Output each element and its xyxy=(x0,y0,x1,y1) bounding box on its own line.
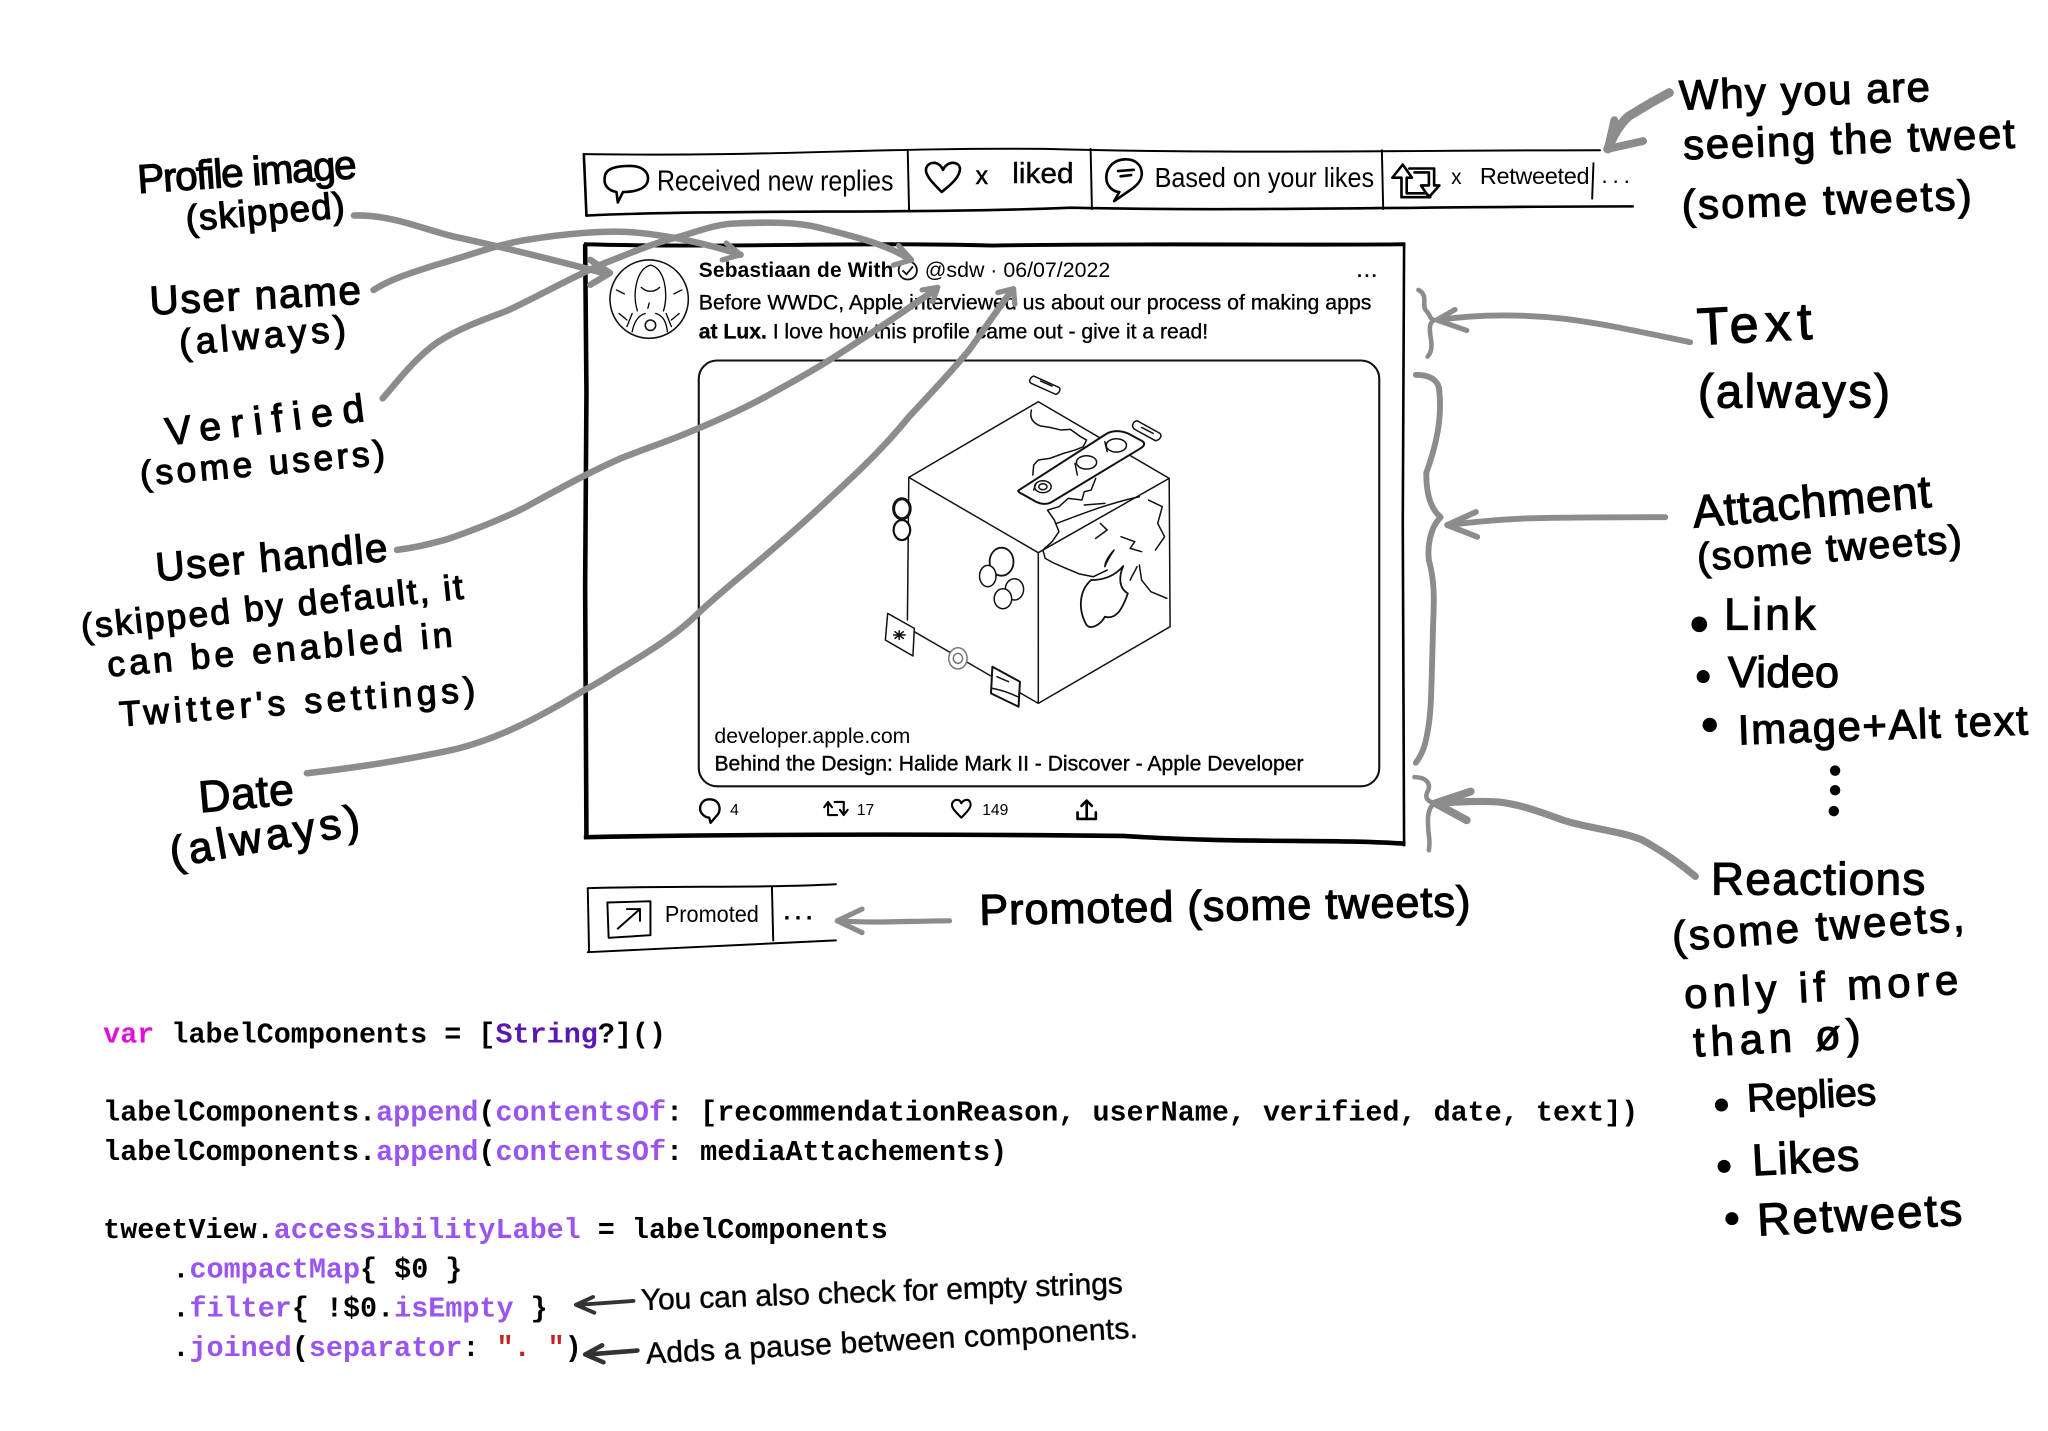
label: verified: Verified xyxy=(163,387,367,454)
icon: topic bubble xyxy=(1106,159,1142,201)
reason: based on your likes: Based on your likes xyxy=(1155,162,1374,193)
handle and date: @sdw · 06/07/2022 xyxy=(925,257,1110,282)
arrow: why you are seeing the tweet xyxy=(1608,93,1669,149)
icon: retweet count: 17 xyxy=(857,802,874,819)
label: user handle: User handle xyxy=(154,524,389,590)
tweet text xyxy=(699,290,1371,343)
label: date: Date xyxy=(196,765,296,822)
label: reactions: only if more xyxy=(1683,956,1959,1017)
annotation: pause between components: Adds a pause between components. xyxy=(645,1312,1139,1371)
label: profile image: (skipped) xyxy=(184,184,346,239)
reactions row xyxy=(700,799,1096,823)
label: reactions xyxy=(1670,854,1966,1246)
icon: like count xyxy=(952,800,1008,819)
link title: Behind the Design: Halide Mark II - Discover - Apple Developer xyxy=(714,751,1304,776)
code block: var labelComponents = [String?]() xyxy=(103,1018,666,1051)
arrow: promoted xyxy=(837,909,950,933)
icon: heart xyxy=(926,163,960,192)
reason: x liked xyxy=(976,158,1074,190)
icon: profile image xyxy=(610,260,688,338)
icon: reply count: 4 xyxy=(730,802,739,819)
arrow: verified xyxy=(383,223,912,398)
code block: labelComponents.append(contentsOf: [recommendationReason, userName, verified, date, text]) xyxy=(103,1097,1638,1130)
label: user handle: can be enabled in xyxy=(106,616,454,685)
reason: received new replies: Received new replies xyxy=(657,166,893,198)
promoted text: Promoted xyxy=(665,901,759,927)
icon: like count: 149 xyxy=(982,802,1008,819)
label: attachment: Attachment xyxy=(1690,466,1933,538)
icon: verified badge xyxy=(899,261,917,280)
label: why you are seeing the tweet: seeing the tweet xyxy=(1682,110,2016,168)
reason: x retweeted: Retweeted xyxy=(1480,163,1590,189)
label: text: Text xyxy=(1696,293,1814,357)
code block xyxy=(103,1018,1638,1365)
label: why you are seeing the tweet: (some tweets) xyxy=(1681,171,1972,228)
panel: link attachment xyxy=(699,360,1379,786)
panel: tweet card xyxy=(584,244,1405,846)
label: profile image: Profile image xyxy=(136,141,358,202)
label: user handle xyxy=(79,524,476,734)
user name: Sebastiaan de With xyxy=(699,259,893,282)
panel: promoted strip xyxy=(588,884,836,952)
annotation: empty strings: You can also check for empty strings xyxy=(640,1267,1123,1317)
label: text xyxy=(1696,293,1890,418)
panel: recommendation reason strip xyxy=(584,149,1633,216)
icon: retweet count xyxy=(824,802,874,819)
more dots: ... xyxy=(784,899,812,925)
side circles xyxy=(894,499,910,519)
icon: speech bubble xyxy=(605,166,648,202)
list: reaction types xyxy=(1715,1071,1963,1246)
tweet text: Before WWDC, Apple interviewed us about our process of making apps xyxy=(699,290,1371,315)
floating pills xyxy=(1030,376,1060,394)
label: user name: User name xyxy=(148,267,362,324)
icon: share xyxy=(1078,801,1096,819)
list: reaction types: Retweets xyxy=(1756,1184,1963,1246)
label: text: (always) xyxy=(1698,365,1890,418)
code block: labelComponents.append(contentsOf: mediaAttachements) xyxy=(103,1136,1007,1169)
illustration: isometric cube xyxy=(885,376,1170,707)
label: verified: (some users) xyxy=(138,434,386,494)
reason: x liked: x xyxy=(976,163,989,190)
label: reactions: than ø) xyxy=(1692,1010,1861,1066)
code block: .compactMap{ $0 } xyxy=(172,1253,462,1286)
label: user name: (always) xyxy=(177,308,347,363)
arrow: profile image xyxy=(354,215,610,285)
label: attachment: (some tweets) xyxy=(1696,518,1963,580)
list: attachment types: Video xyxy=(1728,649,1839,697)
list: reaction types: Likes xyxy=(1751,1131,1860,1186)
code block: tweetView.accessibilityLabel = labelComponents xyxy=(103,1214,888,1247)
brace and arrow: text xyxy=(1418,290,1690,357)
label: reactions: (some tweets, xyxy=(1670,893,1966,960)
code block: .joined(separator: ". ") xyxy=(172,1332,582,1365)
more dots: ... xyxy=(1601,162,1630,188)
link domain: developer.apple.com xyxy=(714,725,910,748)
icon: retweet xyxy=(1392,165,1439,197)
arrow: user handle xyxy=(397,287,938,550)
bottom markers xyxy=(885,613,914,656)
tweet text: at Lux. I love how this profile came out - give it a read! xyxy=(699,318,1208,343)
control bar xyxy=(1018,431,1144,504)
label: verified xyxy=(138,387,386,494)
reason: x retweeted: x xyxy=(1451,166,1462,189)
list: reaction types: Replies xyxy=(1746,1071,1877,1121)
label: user handle: (skipped by default, it xyxy=(79,568,465,647)
list: attachment types xyxy=(1691,591,2029,816)
label: profile image xyxy=(136,141,358,239)
label: user handle: Twitter's settings) xyxy=(118,670,476,734)
label: why you are seeing the tweet xyxy=(1678,63,2016,228)
label: why you are seeing the tweet: Why you are xyxy=(1678,63,1931,119)
brace and arrow: reactions xyxy=(1415,777,1695,876)
code block: .filter{ !$0.isEmpty } xyxy=(172,1293,548,1326)
arrow: user name xyxy=(374,232,741,290)
list: attachment types: Image+Alt text xyxy=(1737,696,2029,753)
list: attachment types: Link xyxy=(1724,591,1816,640)
label: reactions: Reactions xyxy=(1711,854,1925,905)
more menu: ... xyxy=(1357,260,1377,281)
brace and arrow: attachment xyxy=(1416,375,1665,763)
arrow: date xyxy=(307,289,1015,773)
label: promoted: Promoted (some tweets) xyxy=(979,878,1471,935)
icon: reply count xyxy=(700,799,739,823)
label: date: (always) xyxy=(166,797,363,877)
label: user name xyxy=(148,267,362,363)
reason: x liked: liked xyxy=(1012,158,1074,190)
icon: promoted arrow xyxy=(607,901,650,938)
label: attachment xyxy=(1690,466,2029,816)
apple logo xyxy=(1081,566,1128,627)
